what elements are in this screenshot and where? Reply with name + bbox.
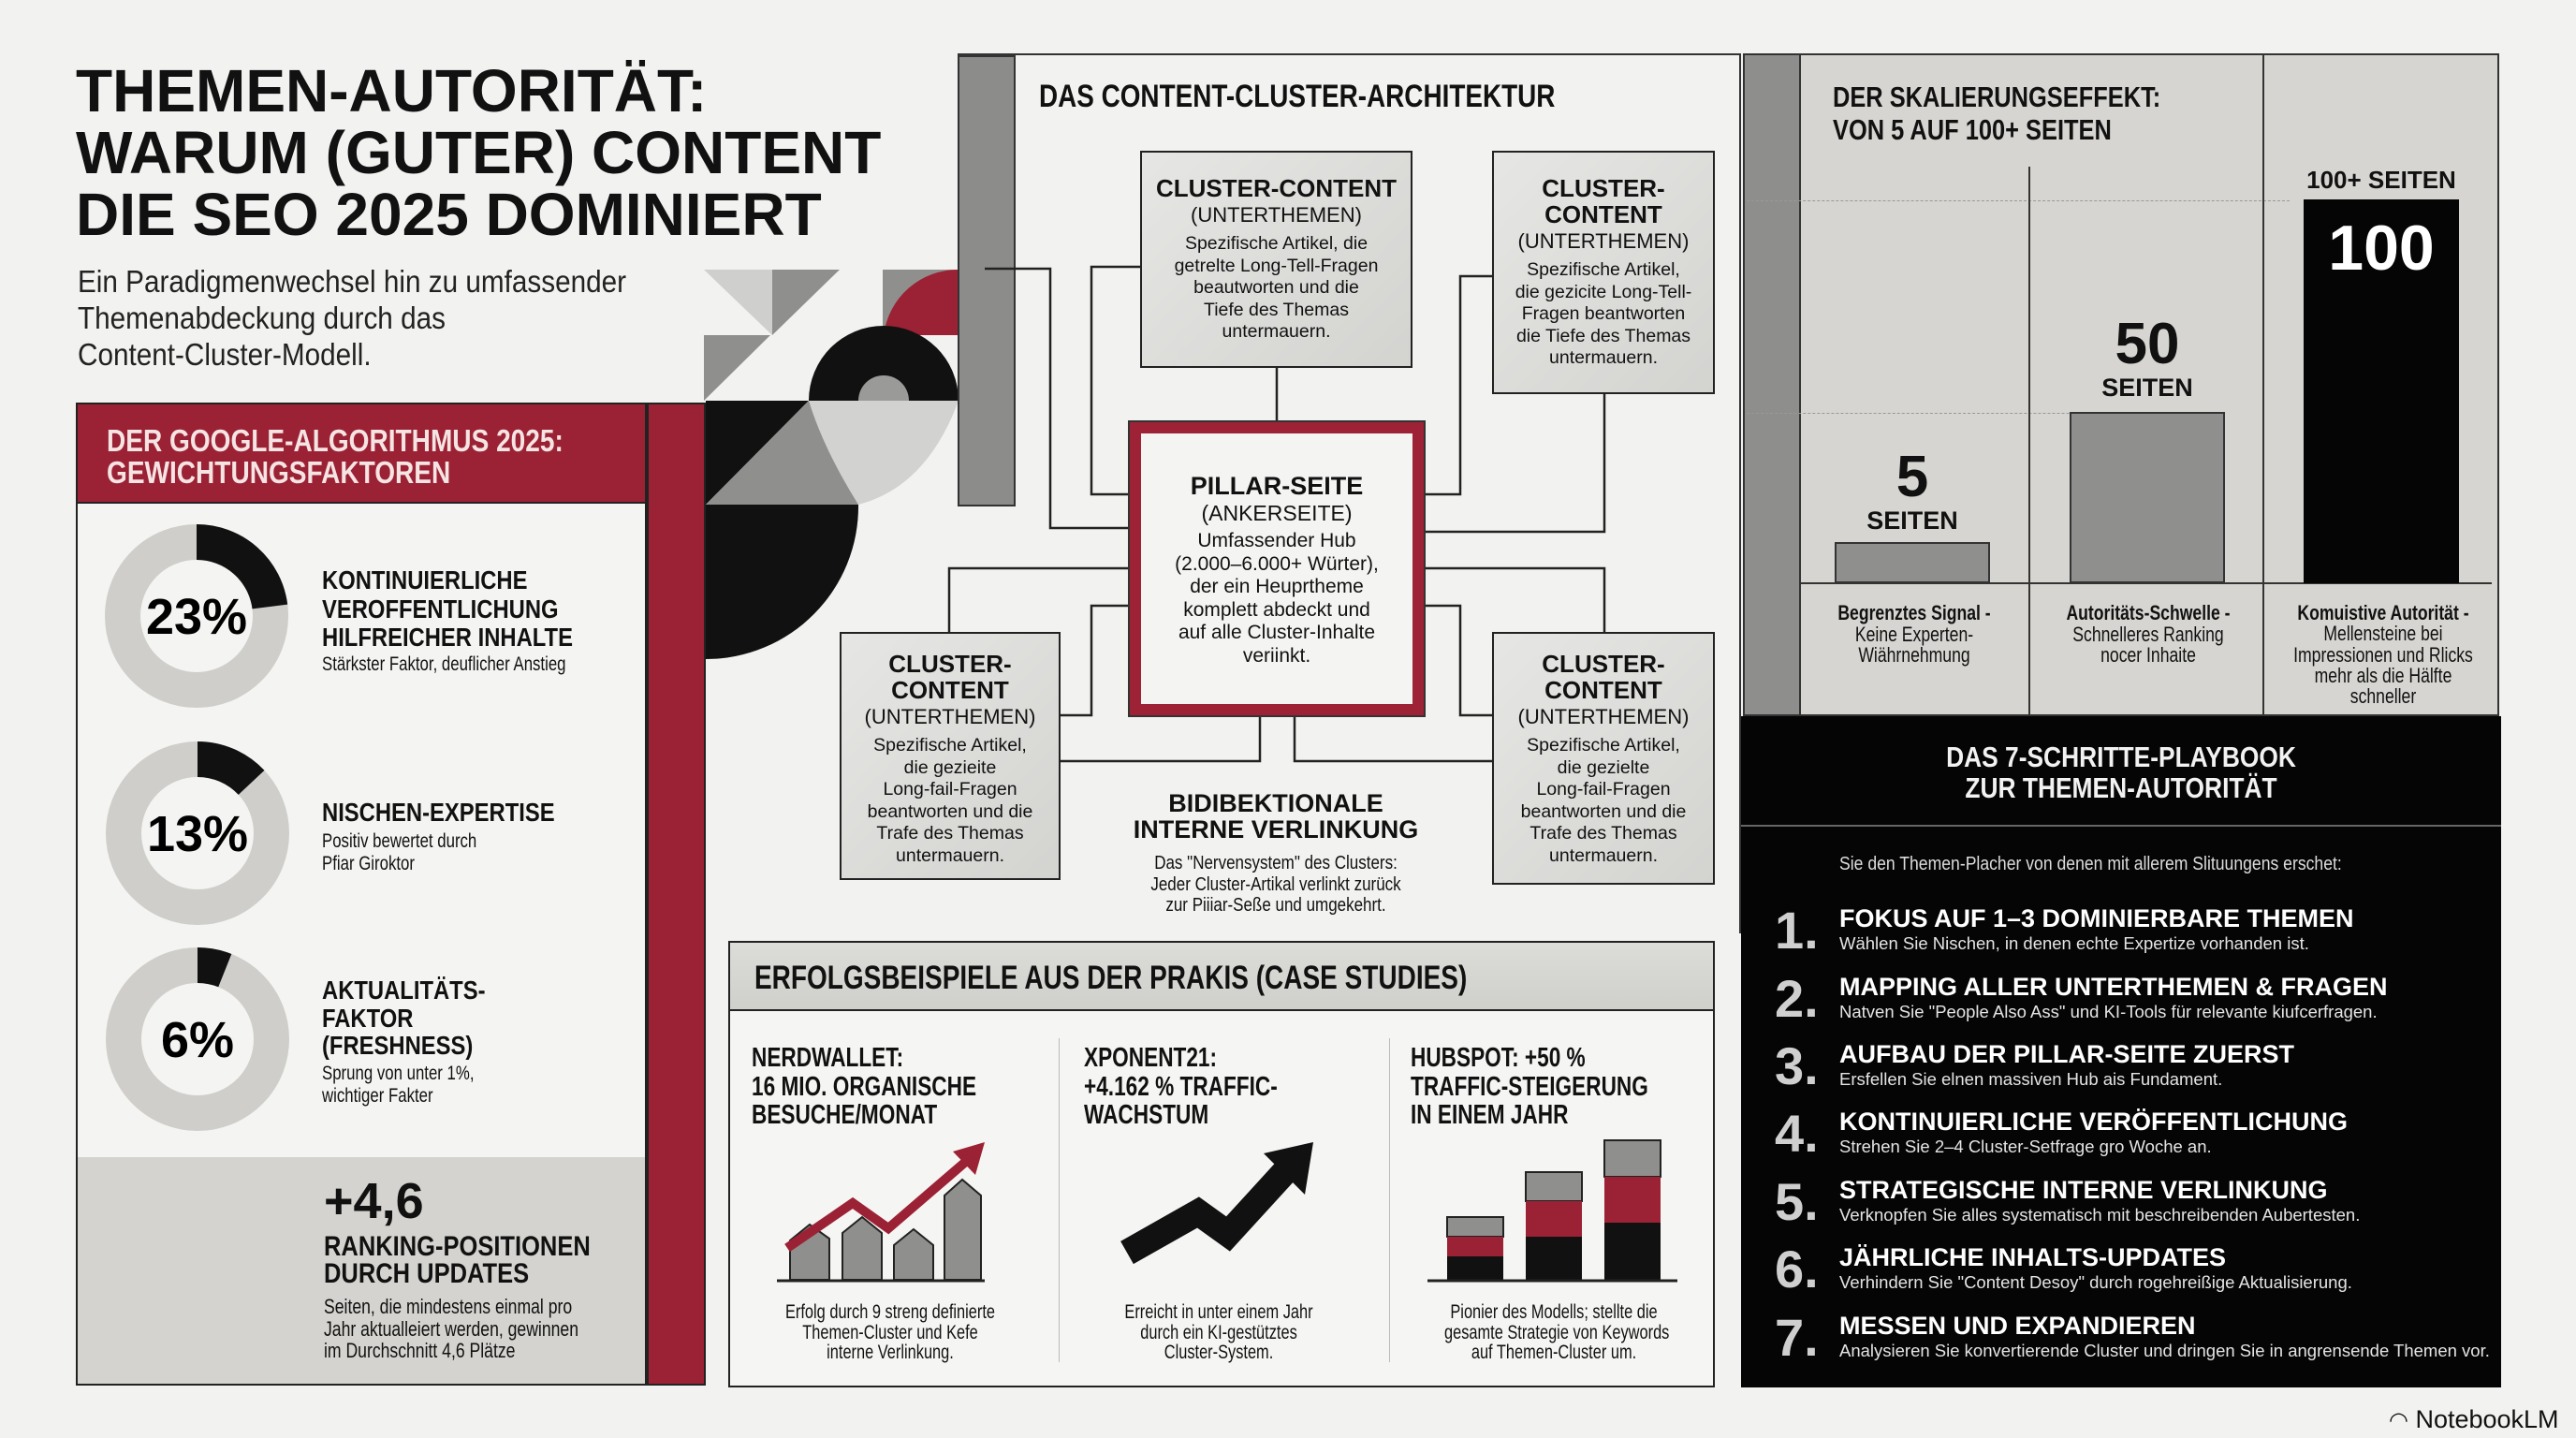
grid lines [1747,200,2290,201]
cluster box top-right: Spezifische Artikel, [1527,259,1680,280]
factor text 1: VEROFFENTLICHUNG [322,594,559,624]
bar 100: 100 [2328,213,2435,284]
label 5: SEITEN [1866,506,1958,535]
cluster box top-right: CONTENT [1544,200,1662,228]
cluster box bottom-right [1492,632,1715,885]
step 4 [1775,1104,2348,1163]
red side stripe [647,403,706,1386]
step 1 [1775,901,2354,960]
label 5 [1866,445,1958,535]
case 2 description: Cluster-System. [1164,1342,1273,1363]
case 1 description: Erfolg durch 9 streng definierte [785,1301,995,1323]
bar 100 [2304,199,2459,583]
case 2 heading: +4.162 % TRAFFIC- [1084,1071,1278,1101]
case 1 heading: BESUCHE/MONAT [752,1100,937,1130]
stat label: RANKING-POSITIONEN [324,1231,591,1262]
factor text 1: HILFREICHER INHALTE [322,623,573,652]
caption 2: nocer Inhaite [2100,643,2196,667]
label 50: 50 [2115,312,2179,376]
panel: google algorithm factors [76,403,706,1386]
gray vertical bar [958,55,1016,506]
step 3 [1775,1036,2294,1095]
case 2 heading: WACHSTUM [1084,1100,1208,1130]
label 50 [2101,312,2193,402]
step 1: 1. [1775,901,1819,960]
case 2 description: Erreicht in unter einem Jahr [1124,1301,1313,1323]
caption 2 [2066,601,2231,667]
case 1 heading: 16 MIO. ORGANISCHE [752,1071,976,1101]
panel: content cluster architecture [958,53,1741,933]
bar 5 [1835,542,1990,583]
dividers [2028,167,2030,714]
factor text 2 [322,798,555,874]
cluster box bottom-left: die gezieite [904,756,996,777]
panel header: GEWICHTUNGSFAKTOREN [107,455,450,490]
pillar page box: Umfassender Hub [1197,530,1356,551]
cluster box top-left: Spezifische Artikel, die [1185,233,1368,254]
step 5: 5. [1775,1172,1819,1231]
step 1: Wählen Sie Nischen, in denen echte Expertize vorhanden ist. [1839,933,2309,953]
bidirectional linking note: Das "Nervensystem" des Clusters: [1154,853,1398,873]
step 6 [1775,1240,2352,1299]
cluster box top-left: getrelte Long-Tell-Fragen [1175,255,1378,275]
cluster box bottom-right: Spezifische Artikel, [1527,735,1680,756]
bidirectional linking note [1134,789,1418,916]
subtitle: Content-Cluster-Modell. [78,337,372,372]
title: DIE SEO 2025 DOMINIERT [76,181,822,248]
cluster box bottom-left: beantworten und die [868,801,1032,822]
cluster box top-left: CLUSTER-CONTENT [1156,174,1397,202]
cluster heading: DAS CONTENT-CLUSTER-ARCHITEKTUR [1039,79,1555,114]
step 2: MAPPING ALLER UNTERTHEMEN & FRAGEN [1839,973,2387,1001]
cluster box bottom-right: CONTENT [1544,676,1662,704]
factor text 1: KONTINUIERLICHE [322,565,527,594]
pillar page box: (ANKERSEITE) [1201,501,1353,525]
playbook heading [1946,741,2296,804]
caption 1: Wiährnehmung [1858,643,1970,667]
cluster box bottom-left: Spezifische Artikel, [873,735,1027,756]
panel: 7-step playbook [1741,716,2501,1387]
bidirectional linking note: INTERNE VERLINKUNG [1134,815,1418,844]
case 3 heading [1411,1043,1648,1130]
bidirectional linking note: zur Piiiar-Seße und umgekehrt. [1165,895,1386,916]
dividers [1059,1038,1060,1362]
panel header: DER GOOGLE-ALGORITHMUS 2025: [107,423,564,458]
case 2 heading: XPONENT21: [1084,1043,1217,1073]
cluster box bottom-left [840,632,1061,880]
cluster box top-left: (UNTERTHEMEN) [1191,203,1362,227]
caption 3 [2293,601,2473,708]
cluster box top-right: Fragen beantworten [1522,303,1685,324]
cluster box bottom-right: CLUSTER- [1542,650,1665,678]
icon: growth bars with red arrow [777,1142,985,1283]
step 4: KONTINUIERLICHE VERÖFFENTLICHUNG [1839,1108,2348,1136]
title: THEMEN-AUTORITÄT: [76,57,707,125]
pillar page box: auf alle Cluster-Inhalte [1178,622,1375,643]
title [76,57,881,248]
step 6: JÄHRLICHE INHALTS-UPDATES [1839,1243,2226,1271]
NotebookLM logo: ◠ NotebookLM [2389,1405,2559,1433]
intro: Sie den Themen-Placher von denen mit allerem Slituungens erschet: [1839,854,2342,874]
pillar page box: veriinkt. [1243,645,1310,667]
cluster box top-left [1140,151,1412,368]
stat description [324,1295,578,1362]
donut 6%: 6% [161,1012,234,1068]
cluster box bottom-right: die gezielte [1558,756,1649,777]
step 5 [1775,1172,2360,1231]
step 3: AUFBAU DER PILLAR-SEITE ZUERST [1839,1040,2294,1068]
step 6: 6. [1775,1240,1819,1299]
factor text 2: NISCHEN-EXPERTISE [322,798,555,827]
chart heading: VON 5 AUF 100+ SEITEN [1833,113,2112,146]
pillar page box: der ein Heuprtheme [1190,576,1364,597]
icon: black zigzag arrow [1120,1142,1313,1264]
case studies header [730,943,1713,1011]
donut 23%: 23% [146,589,247,645]
step 7 [1775,1308,2490,1367]
case 1 description: interne Verlinkung. [827,1342,954,1363]
cluster box top-left: beautworten und die [1193,277,1359,298]
donut 23% [105,524,288,708]
factor text 3: (FRESHNESS) [322,1031,473,1060]
label 50: SEITEN [2101,374,2193,402]
cluster box bottom-left: CLUSTER- [888,650,1012,678]
stat description: Seiten, die mindestens einmal pro [324,1295,572,1318]
cluster box bottom-right: Trafe des Themas [1530,823,1677,844]
case 3 heading: HUBSPOT: +50 % [1411,1043,1586,1073]
case 1 description: Themen-Cluster und Kefe [802,1322,978,1343]
case 3 description: Pionier des Modells; stellte die [1450,1301,1658,1323]
chart heading: DER SKALIERUNGSEFFEKT: [1833,81,2160,113]
baseline [1801,582,2492,584]
cluster box bottom-left: Trafe des Themas [876,823,1024,844]
caption 1 [1837,601,1991,667]
playbook heading: DAS 7-SCHRITTE-PLAYBOOK [1946,741,2296,773]
pillar page box: PILLAR-SEITE [1191,472,1363,500]
icon: stacked bar chart [1427,1139,1677,1283]
case 2 heading [1084,1043,1278,1130]
case 1 heading [752,1043,976,1130]
case 2 description [1124,1301,1313,1363]
cluster box top-right: CLUSTER- [1542,174,1665,202]
playbook heading: ZUR THEMEN-AUTORITÄT [1965,771,2277,804]
cluster box top-right: (UNTERTHEMEN) [1518,229,1689,253]
label 5: 5 [1896,445,1928,509]
factor text 3: wichtiger Fakter [322,1084,433,1107]
cluster box bottom-right: beantworten und die [1521,801,1686,822]
cluster box bottom-right: untermauern. [1549,844,1658,865]
step 4: 4. [1775,1104,1819,1163]
step 1: FOKUS AUF 1–3 DOMINIERBARE THEMEN [1839,904,2354,932]
case 1 heading: NERDWALLET: [752,1043,903,1073]
cluster box bottom-left: CONTENT [891,676,1009,704]
pillar page box: (2.000–6.000+ Würter), [1175,553,1379,575]
subtitle: Ein Paradigmenwechsel hin zu umfassender [78,264,626,299]
factor text 3 [322,976,486,1107]
pillar page box [1130,422,1424,715]
case 3 description: gesamte Strategie von Keywords [1444,1322,1669,1343]
cluster box top-left: Tiefe des Themas [1204,300,1349,320]
factor text 3: Sprung von unter 1%, [322,1062,475,1084]
panel body [76,504,647,1386]
ranking stat box [76,1157,647,1386]
step 3: 3. [1775,1036,1819,1095]
big number: +4,6 [324,1173,424,1229]
caption 3: Impressionen und Rlicks [2293,643,2473,667]
chart heading [1833,81,2160,146]
caption 3: mehr als die Hälfte [2315,664,2452,687]
factor text 3: FAKTOR [322,1004,413,1032]
subtitle: Themenabdeckung durch das [78,301,446,335]
factor text 2: Pfiar Giroktor [322,853,415,874]
factor text 1 [322,565,573,674]
bidirectional linking note: BIDIBEKTIONALE [1168,789,1383,817]
step 7: Analysieren Sie konvertierende Cluster und dringen Sie in angrensende Themen vor. [1839,1341,2490,1360]
case 3 description [1444,1301,1669,1363]
caption 2: Schnelleres Ranking [2072,622,2224,646]
case 1 description [785,1301,995,1363]
panel: case studies [728,941,1715,1387]
label 100+: 100+ SEITEN [2306,166,2456,194]
caption 3: Mellensteine bei [2323,622,2443,645]
bar 50 [2070,412,2225,583]
stat label [324,1231,591,1289]
stat description: Jahr aktualleiert werden, gewinnen [324,1316,578,1341]
cluster box bottom-left: untermauern. [896,844,1004,865]
step 2: 2. [1775,969,1819,1028]
caption 3: Komuistive Autorität - [2297,601,2469,624]
stat description: im Durchschnitt 4,6 Plätze [324,1339,515,1362]
subtitle [78,264,626,372]
step 5: STRATEGISCHE INTERNE VERLINKUNG [1839,1176,2328,1204]
factor text 3: AKTUALITÄTS- [322,976,486,1005]
cluster box top-right: die Tiefe des Themas [1516,326,1690,346]
caption 1: Begrenztes Signal - [1837,601,1991,624]
step 4: Strehen Sie 2–4 Cluster-Setfrage gro Woche an. [1839,1137,2212,1156]
left stripe [1745,55,1801,714]
caption 3: schneller [2350,684,2416,708]
factor text 2: Positiv bewertet durch [322,829,476,852]
cluster box top-left: untermauern. [1222,321,1330,342]
case 2 description: durch ein KI-gestütztes [1140,1322,1297,1343]
title: WARUM (GUTER) CONTENT [76,119,881,186]
stat label: DURCH UPDATES [324,1258,529,1289]
step 7: MESSEN UND EXPANDIEREN [1839,1312,2196,1340]
cluster box bottom-left: (UNTERTHEMEN) [865,705,1035,728]
donut 6% [106,947,289,1131]
pillar page box: komplett abdeckt und [1183,599,1370,621]
case studies header: ERFOLGSBEISPIELE AUS DER PRAKIS (CASE STUDIES) [754,960,1467,996]
caption 1: Keine Experten- [1855,622,1973,646]
step 2 [1775,969,2387,1028]
step 5: Verknopfen Sie alles systematisch mit beschreibenden Aubertesten. [1839,1205,2360,1225]
step 3: Ersfellen Sie elnen massiven Hub ais Fundament. [1839,1069,2222,1089]
step 7: 7. [1775,1308,1819,1367]
case 3 heading: IN EINEM JAHR [1411,1100,1568,1130]
caption 2: Autoritäts-Schwelle - [2066,601,2231,624]
cluster box top-right: untermauern. [1549,347,1658,368]
case 3 heading: TRAFFIC-STEIGERUNG [1411,1071,1648,1101]
step 2: Natven Sie "People Also Ass" und KI-Tools für relevante kiufcerfragen. [1839,1002,2378,1021]
factor text 1: Stärkster Faktor, deuflicher Anstieg [322,653,566,674]
cluster box bottom-right: (UNTERTHEMEN) [1518,705,1689,728]
step 6: Verhindern Sie "Content Desoy" durch rogehreißige Aktualisierung. [1839,1272,2352,1292]
cluster box top-right [1492,151,1715,394]
panel: scaling effect chart [1743,53,2499,716]
panel header [76,403,647,504]
donut 13% [106,741,289,925]
heading rule [1741,825,2501,827]
bidirectional linking note: Jeder Cluster-Artikal verlinkt zurück [1150,874,1401,895]
cluster box bottom-left: Long-fail-Fragen [883,779,1017,800]
case 3 description: auf Themen-Cluster um. [1471,1342,1636,1363]
donut 13%: 13% [147,806,248,862]
cluster box bottom-right: Long-fail-Fragen [1536,779,1671,800]
cluster box top-right: die gezicite Long-Tell- [1515,281,1691,301]
